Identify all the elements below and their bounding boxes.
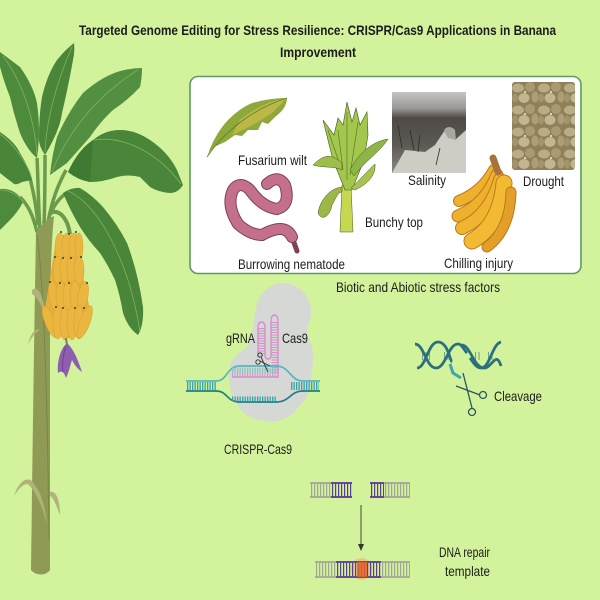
icon: chilling injury bananas [458, 158, 511, 247]
label: DNA repair template: DNA repair [439, 544, 490, 560]
panel: biotic and abiotic stress factors [190, 76, 581, 274]
repaired DNA [315, 558, 410, 580]
banana flower [58, 338, 82, 378]
arrow [358, 505, 364, 551]
image: salinity soil [392, 92, 466, 173]
label: DNA repair template: template [445, 563, 490, 579]
banana plant illustration [0, 43, 183, 574]
leaf: left lower [0, 189, 23, 230]
Cas9 protein blob [229, 283, 313, 421]
label: Cleavage: Cleavage [494, 388, 542, 404]
icon: scissors [256, 353, 270, 372]
icon: nematode worm [230, 179, 297, 251]
leaf: upper right [50, 68, 142, 175]
leaf: upper centre [39, 43, 74, 155]
diagram: DNA repair template [310, 483, 410, 580]
leaf stalks [20, 155, 68, 232]
banana bunch [39, 231, 96, 340]
leaf: upper left [0, 52, 39, 158]
DNA rungs [187, 370, 319, 399]
icon: DNA cleavage with scissors [415, 342, 501, 416]
cut arrow mark [450, 364, 461, 378]
label: DNA repair template [439, 544, 490, 579]
leaf veins [0, 47, 181, 332]
trunk [31, 216, 54, 574]
label: gRNA: gRNA [226, 330, 256, 346]
label: Drought: Drought [523, 173, 564, 189]
broken DNA right [370, 483, 410, 497]
leaf: right [68, 130, 183, 193]
label: Fusarium wilt: Fusarium wilt [238, 152, 307, 168]
DNA strands [186, 366, 320, 402]
bunch stem [50, 212, 70, 234]
label: Cas9: Cas9 [282, 330, 308, 346]
title [79, 22, 556, 60]
label: CRISPR-Cas9: CRISPR-Cas9 [224, 441, 292, 457]
broken DNA left [310, 483, 352, 497]
leaf: lower right [63, 188, 143, 335]
title: Improvement [280, 44, 356, 60]
scissors [456, 373, 486, 416]
image: drought pebbles [512, 82, 575, 170]
trunk sheaths [14, 289, 60, 524]
label: Salinity: Salinity [408, 172, 446, 188]
caption: biotic and abiotic stress factors: Biotic and Abiotic stress factors [336, 279, 500, 295]
label: Bunchy top: Bunchy top [365, 214, 423, 230]
label: Burrowing nematode: Burrowing nematode [238, 256, 345, 272]
leaf: left middle [0, 132, 32, 184]
icon: bunchy top plant [313, 102, 388, 232]
diagram: CRISPR-Cas9 complex [186, 283, 320, 421]
gRNA hairpins [232, 315, 278, 377]
icon: fusarium wilt leaf [207, 98, 287, 157]
label: Chilling injury: Chilling injury [444, 255, 513, 271]
